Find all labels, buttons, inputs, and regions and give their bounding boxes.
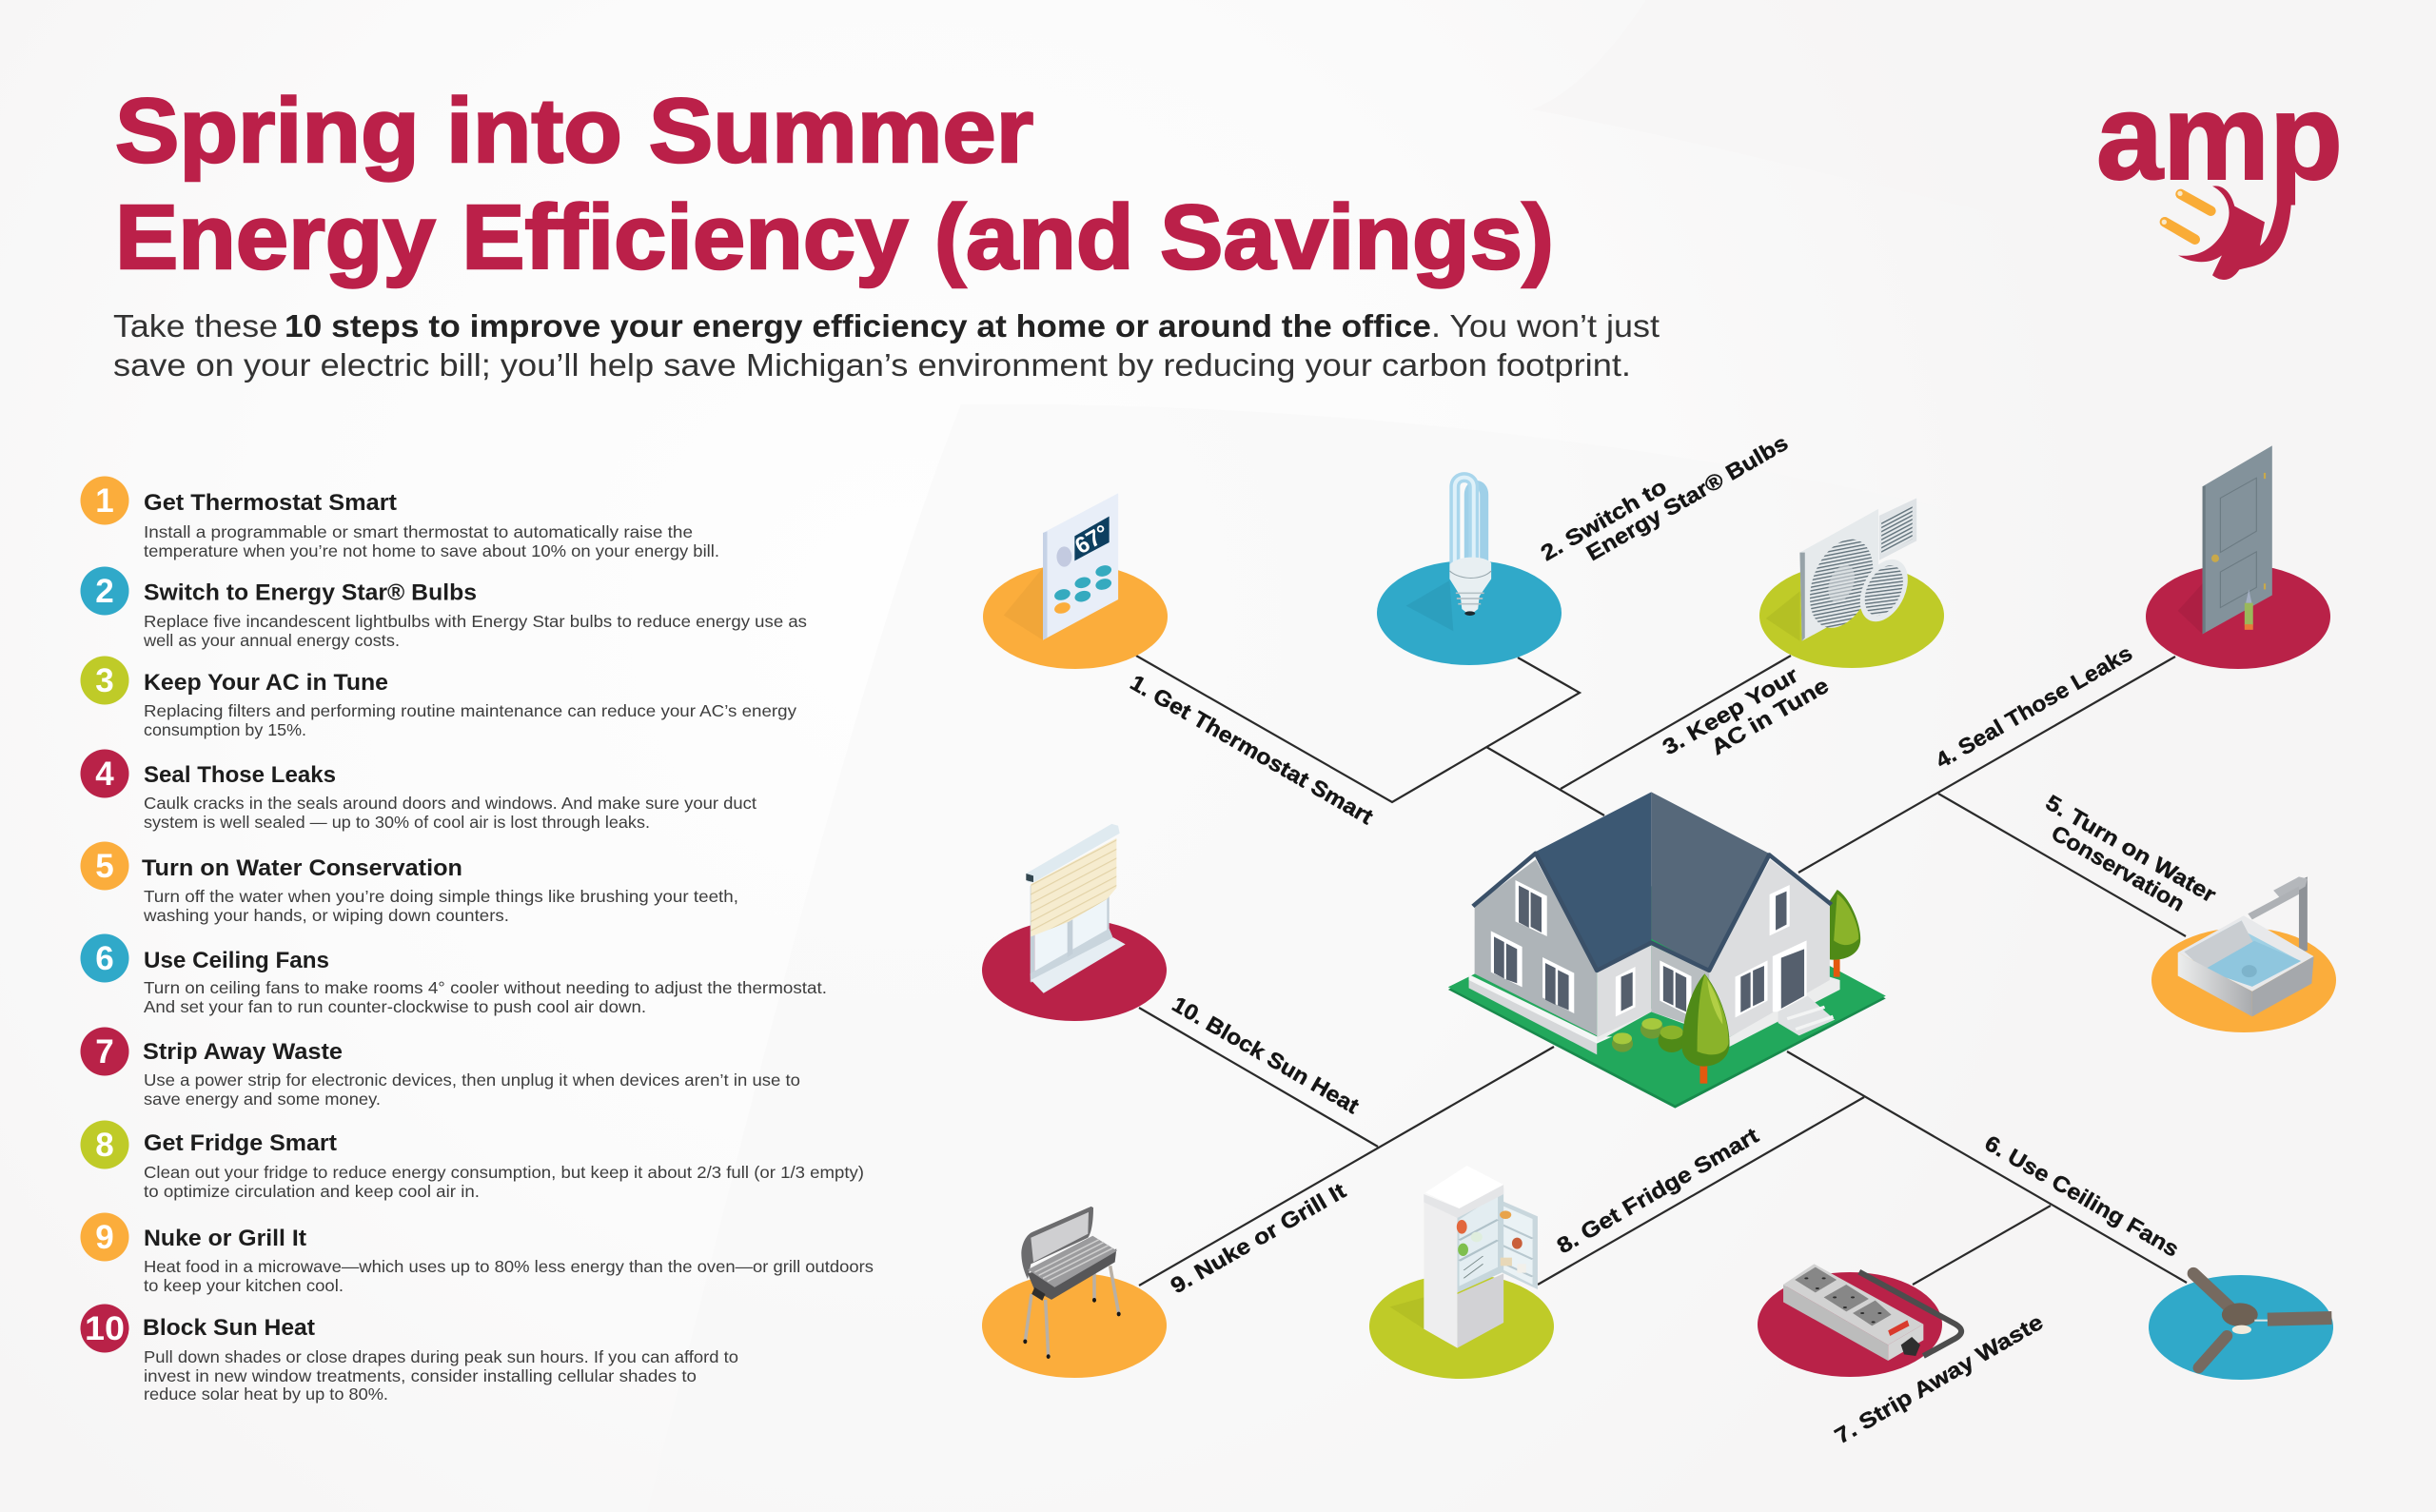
step 7: Use a power strip for electronic devices, then unplug it when devices aren’t in use to [144, 1070, 800, 1090]
rear tree [1830, 890, 1860, 977]
step 5: 5 [95, 848, 114, 885]
step list [80, 476, 874, 1404]
intro text: . You won’t just [1431, 308, 1660, 344]
step 8: Clean out your fridge to reduce energy consumption, but keep it about 2/3 full (or 1/3 empty) [144, 1163, 864, 1182]
icon: door and caulk on crimson disc [2146, 445, 2330, 669]
step 9: Nuke or Grill It [144, 1226, 306, 1251]
label 5: Conservation [2048, 820, 2189, 916]
step 5: Turn on Water Conservation [142, 855, 462, 881]
icon: air conditioner on lime disc [1759, 498, 1944, 668]
label 1: 1. Get Thermostat Smart [1127, 670, 1378, 830]
label 2: 2. Switch to [1536, 474, 1671, 565]
step 6: Use Ceiling Fans [144, 948, 329, 973]
label 3 [1658, 662, 1833, 759]
step 3: Replacing filters and performing routine maintenance can reduce your AC’s energy [144, 701, 796, 720]
icon: ceiling fan on teal disc [2149, 1273, 2333, 1380]
title [115, 80, 1554, 288]
step 10: invest in new window treatments, consider installing cellular shades to [144, 1366, 697, 1385]
intro text: save on your electric bill; you’ll help save Michigan’s environment by reducing your carbon footprint. [113, 347, 1631, 383]
front tree [1681, 973, 1729, 1084]
label 3: 3. Keep Your [1658, 662, 1802, 759]
step 2 [80, 567, 807, 650]
diagram labels [1127, 430, 2220, 1448]
roof [1473, 792, 1832, 971]
icon: fridge on lime disc [1369, 1166, 1554, 1379]
step 3: consumption by 15%. [144, 720, 306, 739]
step 6 [80, 934, 827, 1016]
label 2 [1536, 430, 1792, 565]
step 6: 6 [95, 940, 114, 977]
step 7: save energy and some money. [144, 1090, 381, 1109]
logo: amp: amp [2096, 69, 2343, 206]
step 8 [80, 1121, 864, 1201]
step 3 [80, 657, 796, 739]
label 9: 9. Nuke or Grill It [1167, 1178, 1350, 1298]
step 7: Strip Away Waste [143, 1039, 343, 1065]
intro text [113, 308, 1660, 383]
step 2: Replace five incandescent lightbulbs with Energy Star bulbs to reduce energy use as [144, 612, 807, 631]
step 3: Keep Your AC in Tune [144, 670, 388, 696]
icon: thermostat on orange disc: 67° [1071, 520, 1113, 560]
steps [1778, 996, 1835, 1035]
step 8: to optimize circulation and keep cool air in. [144, 1182, 480, 1201]
step 1: Install a programmable or smart thermostat to automatically raise the [144, 522, 693, 541]
label 5: 5. Turn on Water [2042, 790, 2220, 907]
step 7: 7 [95, 1033, 114, 1070]
icon: thermostat on orange disc [983, 493, 1168, 669]
label 10: 10. Block Sun Heat [1169, 992, 1364, 1119]
step 4: system is well sealed — up to 30% of cool air is lost through leaks. [144, 813, 650, 832]
step 1: Get Thermostat Smart [144, 490, 397, 516]
step 5 [80, 841, 738, 925]
icon: sink on orange disc [2151, 876, 2336, 1032]
step 4: 4 [95, 756, 114, 793]
label 6: 6. Use Ceiling Fans [1981, 1130, 2184, 1262]
step 3: 3 [95, 662, 114, 699]
step 10: Pull down shades or close drapes during peak sun hours. If you can afford to [144, 1347, 738, 1366]
step 10: Block Sun Heat [143, 1315, 315, 1341]
step 9: to keep your kitchen cool. [144, 1276, 344, 1295]
step 10 [80, 1304, 738, 1404]
step 10: 10 [85, 1310, 125, 1347]
step 4 [80, 750, 756, 832]
step 7 [80, 1028, 800, 1109]
step 10: reduce solar heat by up to 80%. [144, 1384, 388, 1404]
house illustration [1448, 792, 1886, 1109]
step 9: 9 [95, 1219, 114, 1256]
step 9 [80, 1212, 874, 1295]
icon: light bulb on teal disc [1377, 478, 1562, 665]
step 2: well as your annual energy costs. [143, 631, 400, 650]
step 9: Heat food in a microwave—which uses up to 80% less energy than the oven—or grill outdoors [144, 1257, 874, 1276]
step 1: 1 [95, 482, 114, 520]
title: Spring into Summer [115, 80, 1033, 182]
step 1 [80, 476, 719, 560]
step 8: Get Fridge Smart [144, 1130, 337, 1156]
windows [1491, 880, 1807, 1017]
step 2: 2 [95, 573, 114, 610]
title: Energy Efficiency (and Savings) [115, 187, 1554, 288]
icon: power strip on crimson disc [1758, 1264, 1961, 1377]
step 6: Turn on ceiling fans to make rooms 4° cooler without needing to adjust the thermostat. [144, 978, 827, 997]
step 4: Caulk cracks in the seals around doors and windows. And make sure your duct [144, 794, 756, 813]
step 2: Switch to Energy Star® Bulbs [144, 580, 477, 605]
label 4: 4. Seal Those Leaks [1932, 640, 2136, 773]
intro text: Take these [113, 308, 278, 344]
lawn [1448, 878, 1886, 1109]
step 8: 8 [95, 1127, 114, 1164]
intro text: 10 steps to improve your energy efficiency at home or around the office [285, 308, 1431, 344]
label 2: Energy Star® Bulbs [1581, 430, 1792, 565]
logo: amp [2096, 69, 2343, 280]
step 4: Seal Those Leaks [144, 762, 336, 788]
step 1: temperature when you’re not home to save about 10% on your energy bill. [144, 541, 719, 560]
walls [1469, 859, 1840, 1054]
connector lines [1136, 656, 2187, 1286]
label 3: AC in Tune [1707, 673, 1833, 759]
shrubs [1612, 1018, 1685, 1052]
step 5: Turn off the water when you’re doing simple things like brushing your teeth, [144, 887, 738, 906]
step 6: And set your fan to run counter-clockwise to push cool air down. [144, 997, 646, 1016]
step 5: washing your hands, or wiping down counters. [143, 906, 509, 925]
label 7: 7. Strip Away Waste [1831, 1309, 2047, 1448]
label 8: 8. Get Fridge Smart [1553, 1123, 1763, 1258]
icon: window blinds on crimson disc [982, 824, 1167, 1021]
icon: grill on orange disc [982, 1207, 1167, 1378]
